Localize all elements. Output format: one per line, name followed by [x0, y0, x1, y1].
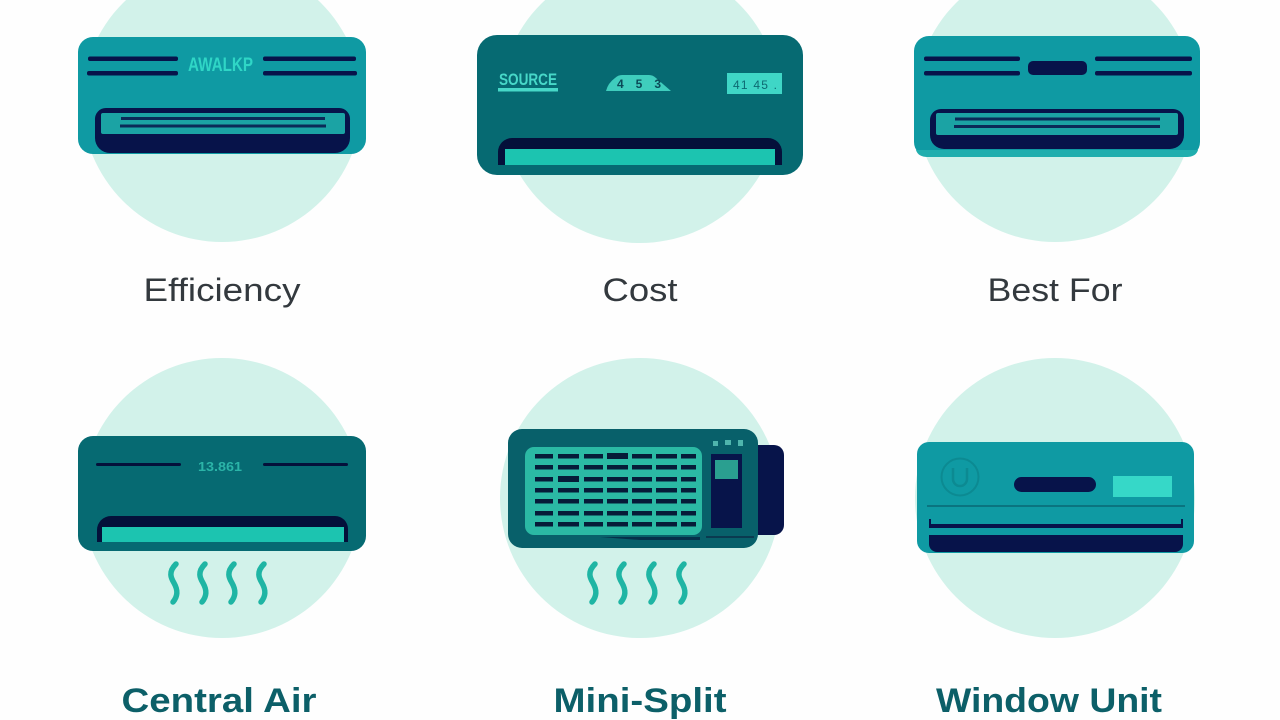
icon: central air unit	[78, 436, 366, 551]
background circle: mini-split	[500, 358, 780, 638]
panel: window unit	[915, 358, 1195, 720]
heading: Window Unit: Window Unit	[936, 682, 1162, 720]
icon: dark wall unit with displays: 4 5 3	[617, 77, 661, 91]
icon: window unit	[917, 442, 1194, 553]
icon: dark wall unit with displays: SOURCE	[499, 70, 557, 89]
heading: Efficiency: Efficiency	[144, 272, 300, 308]
background circle: central air	[82, 358, 362, 638]
heading: Central Air: Central Air	[122, 682, 316, 720]
background circle: cost	[500, 0, 780, 243]
icon: central air unit: 13.861	[198, 459, 242, 474]
icon: teal wall unit with display	[78, 37, 366, 154]
background circle: best for	[915, 0, 1195, 242]
icon: mini-split unit	[508, 429, 784, 548]
panel: best for	[914, 0, 1200, 308]
icon: dark wall unit with displays: 41 45 .	[733, 78, 777, 92]
icon: teal wall unit with pill display	[914, 36, 1200, 157]
heading: Mini-Split: Mini-Split	[554, 682, 726, 720]
icon: airflow waves	[590, 564, 685, 602]
icon: teal wall unit with display: AWALKP	[188, 55, 253, 76]
background circle: efficiency	[82, 0, 362, 242]
panel: mini-split	[500, 358, 784, 720]
panel: cost	[477, 0, 803, 308]
panel: efficiency	[78, 0, 366, 308]
icon: airflow waves	[171, 564, 265, 602]
panel: central air	[78, 358, 366, 720]
heading: Best For: Best For	[988, 272, 1123, 308]
heading: Cost: Cost	[602, 272, 678, 308]
icon: dark wall unit with displays	[477, 35, 803, 175]
background circle: window unit	[915, 358, 1195, 638]
